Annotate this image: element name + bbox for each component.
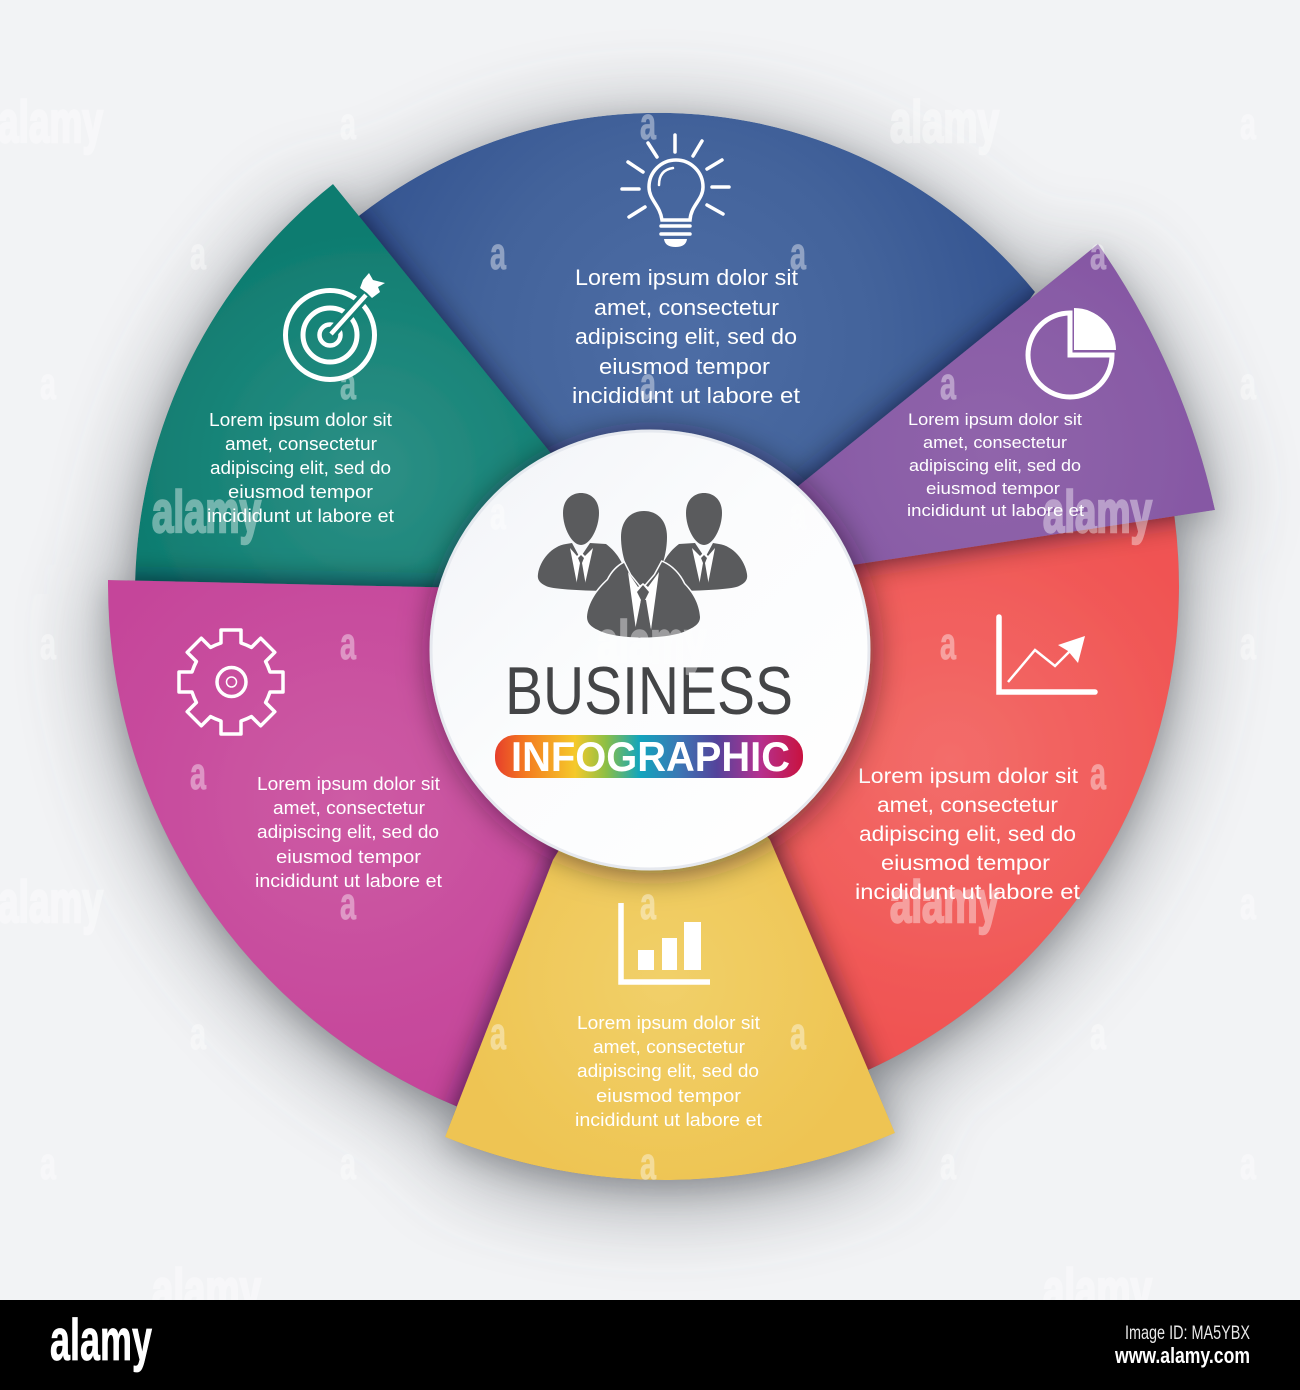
watermark marks: a [40,618,57,669]
person right [655,493,747,591]
footer url: www.alamy.com [1114,1343,1250,1368]
watermark marks: alamy [0,90,103,155]
title: BUSINESS: BUSINESS [505,653,793,729]
watermark marks: a [190,228,207,279]
watermark marks: a [490,228,507,279]
watermark marks: alamy [890,870,999,935]
watermark marks: a [40,1138,57,1189]
text: red segment copy: incididunt ut labore et [855,880,1080,904]
watermark marks: alamy [152,480,261,545]
text: yellow segment copy: incididunt ut labore et [575,1110,762,1130]
text: red segment copy: Lorem ipsum dolor sit [858,764,1078,788]
text: blue segment copy: incididunt ut labore et [572,383,800,408]
watermark marks: a [640,1138,657,1189]
watermark marks: a [940,618,957,669]
text: teal segment copy [207,410,394,526]
watermark marks: a [490,488,507,539]
person center [587,511,700,638]
text: blue segment copy: amet, consectetur [594,295,779,320]
watermark marks: a [790,488,807,539]
watermark marks: a [190,748,207,799]
outer close shadow [108,121,1215,1188]
watermark marks: a [790,228,807,279]
watermark marks: a [340,618,357,669]
text: teal segment copy: amet, consectetur [225,434,377,454]
watermark marks: a [340,98,357,149]
icon: gear [179,630,283,734]
text: blue segment copy: Lorem ipsum dolor sit [575,265,798,290]
panel: purple segment [760,244,1215,579]
footer image id: Image ID: MA5YBX [1125,1323,1250,1344]
text: red segment copy: eiusmod tempor [881,851,1050,875]
text: magenta segment copy [255,774,442,891]
watermark marks: alamy [1043,480,1152,545]
watermark marks: a [940,358,957,409]
watermark marks: a [1240,878,1257,929]
watermark marks: alamy [1043,1258,1152,1323]
watermark marks: a [1090,228,1107,279]
center white circle [431,431,869,869]
panel: red segment [767,515,1180,1070]
watermark marks: a [490,1008,507,1059]
text: purple segment copy [907,410,1084,520]
watermark marks: a [640,878,657,929]
watermark marks: a [340,878,357,929]
panel: teal segment [134,184,568,588]
text: magenta segment copy: amet, consectetur [273,798,425,818]
panel: blue segment [359,113,1035,486]
text: yellow segment copy: Lorem ipsum dolor sit [577,1013,760,1033]
icon: line chart with arrow [999,617,1095,692]
text: magenta segment copy: adipiscing elit, sed do [257,822,439,842]
watermark marks: a [40,358,57,409]
watermark marks: a [1090,748,1107,799]
text: teal segment copy: Lorem ipsum dolor sit [209,410,392,430]
text: magenta segment copy: eiusmod tempor [276,847,421,867]
watermark marks: alamy [597,610,706,675]
text: red segment copy: amet, consectetur [877,793,1058,817]
text: blue segment copy: eiusmod tempor [599,354,770,379]
watermark marks: alamy [890,90,999,155]
text: purple segment copy: amet, consectetur [923,433,1067,452]
text: teal segment copy: eiusmod tempor [228,482,373,502]
text: red segment copy: adipiscing elit, sed do [859,822,1076,846]
text: purple segment copy: eiusmod tempor [926,479,1060,498]
outer wide shadow [108,127,1215,1194]
text: magenta segment copy: Lorem ipsum dolor sit [257,774,440,794]
watermark marks: alamy [0,870,103,935]
watermark marks: a [340,358,357,409]
watermark marks: a [190,1008,207,1059]
watermark marks: a [940,1138,957,1189]
text: yellow segment copy: eiusmod tempor [596,1086,741,1106]
text: yellow segment copy [575,1013,762,1130]
text: purple segment copy: Lorem ipsum dolor sit [908,410,1082,429]
text: yellow segment copy: adipiscing elit, sed do [577,1061,759,1081]
watermark marks: a [640,98,657,149]
icon: three business people [538,493,747,638]
icon: target with arrow [286,273,385,380]
icon: pie chart [1028,308,1116,397]
footer bar [0,1300,1300,1390]
watermark marks: a [1240,618,1257,669]
watermark marks: a [1090,1008,1107,1059]
watermark marks: a [790,1008,807,1059]
watermark marks: alamy [152,1258,261,1323]
text: blue segment copy: adipiscing elit, sed do [575,324,797,349]
subtitle pill: INFOGRAPHIC: INFOGRAPHIC [511,733,790,780]
icon: bar chart [621,903,710,982]
watermark marks: a [340,1138,357,1189]
text: magenta segment copy: incididunt ut labore et [255,871,442,891]
panel: magenta segment [108,562,558,1111]
text: blue segment copy [572,265,800,408]
text: yellow segment copy: amet, consectetur [593,1037,745,1057]
text: purple segment copy: incididunt ut labore et [907,501,1084,520]
watermark marks: a [1240,358,1257,409]
watermark marks: a [1240,1138,1257,1189]
icon: light bulb [622,135,729,247]
watermark marks: a [640,358,657,409]
watermark marks: a [1240,98,1257,149]
text: teal segment copy: incididunt ut labore et [207,506,394,526]
panel: yellow segment [438,826,895,1180]
text: teal segment copy: adipiscing elit, sed do [210,458,391,478]
footer logo: alamy [50,1308,152,1373]
text: purple segment copy: adipiscing elit, sed do [909,456,1081,475]
pie segments [108,113,1215,1180]
person left [538,493,630,591]
text: red segment copy [855,764,1080,904]
